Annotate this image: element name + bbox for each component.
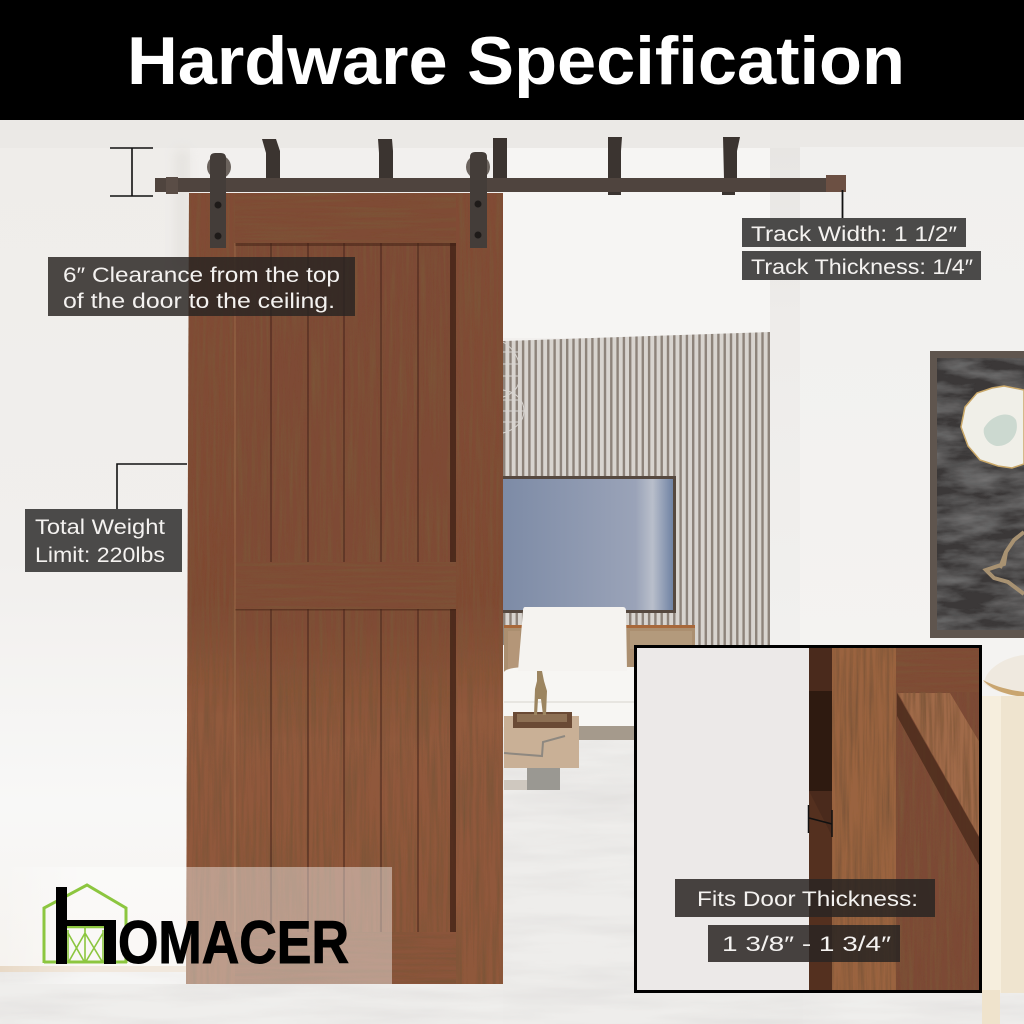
door: recessed planks [235, 243, 456, 933]
room: credenza [504, 625, 695, 675]
hardware: ceiling brackets [262, 137, 740, 195]
inset: top rail [896, 647, 980, 692]
logo: barn door rails [65, 927, 107, 963]
logo: Homacer [44, 885, 349, 976]
logo: green house outline [44, 885, 126, 963]
door: top rail [235, 193, 456, 243]
hardware: left end stop [166, 177, 178, 194]
callout: thickness range [708, 925, 900, 962]
inset: door edge in shadow [809, 647, 832, 990]
callout: thickness range: 1 3/8″ - 1 3/4″ [722, 932, 892, 956]
logo: black H [56, 887, 116, 964]
room: stone coffee table with figurine [504, 671, 579, 790]
hardware: right wheel and strap [466, 152, 490, 248]
header bar [0, 0, 1024, 120]
room: framed dark art with plate and branch [930, 351, 1024, 638]
hardware: left wheel and strap [207, 153, 231, 248]
inset: diagonal brace [898, 693, 980, 838]
logo backing panel [0, 867, 392, 984]
room: slatted accent wall [503, 332, 770, 645]
door shadow on wall [176, 150, 188, 270]
weight callout leader line [117, 464, 187, 510]
callout: total weight limit: Total Weight [35, 515, 165, 539]
inset: diagonal brace shadow [897, 693, 980, 867]
room: white sofa [504, 607, 634, 740]
callout: clearance: 6″ Clearance from the top [63, 263, 340, 287]
inset: border [636, 646, 980, 992]
door: left stile [186, 193, 235, 984]
callout: clearance: of the door to the ceiling. [63, 289, 335, 313]
callout: fits door thickness [675, 879, 935, 917]
inset panel: door thickness detail [636, 646, 980, 992]
room: wall television [503, 476, 676, 613]
door: bottom rail [235, 932, 456, 984]
callout: fits door thickness: Fits Door Thickness: [697, 887, 918, 911]
door: right stile [456, 193, 503, 984]
track callout leader line [842, 190, 844, 220]
hardware: track bar [155, 178, 846, 192]
title: Hardware Specification [127, 23, 905, 99]
callout: total weight limit: Limit: 220lbs [35, 543, 165, 567]
inset: door plank [896, 691, 980, 990]
callout: track thickness: Track Thickness: 1/4″ [751, 255, 973, 279]
hardware: right end stop [826, 175, 846, 192]
barn door [186, 193, 503, 984]
clearance dimension marker [110, 148, 153, 196]
track hardware [155, 137, 846, 248]
callout: track width: Track Width: 1 1/2″ [751, 222, 957, 246]
inset: wall background [636, 647, 809, 990]
inset: thickness measure mark [808, 805, 832, 837]
inset: door stile [832, 647, 896, 990]
callout: total weight limit [25, 509, 182, 572]
icon: wire pendant lamp [503, 342, 524, 433]
callout: track width [742, 218, 966, 247]
door: middle rail [235, 562, 456, 609]
logo: wordmark: OMACER [118, 909, 349, 976]
callout: clearance [48, 257, 355, 316]
room: cream cabinet with bowl [982, 655, 1024, 1024]
